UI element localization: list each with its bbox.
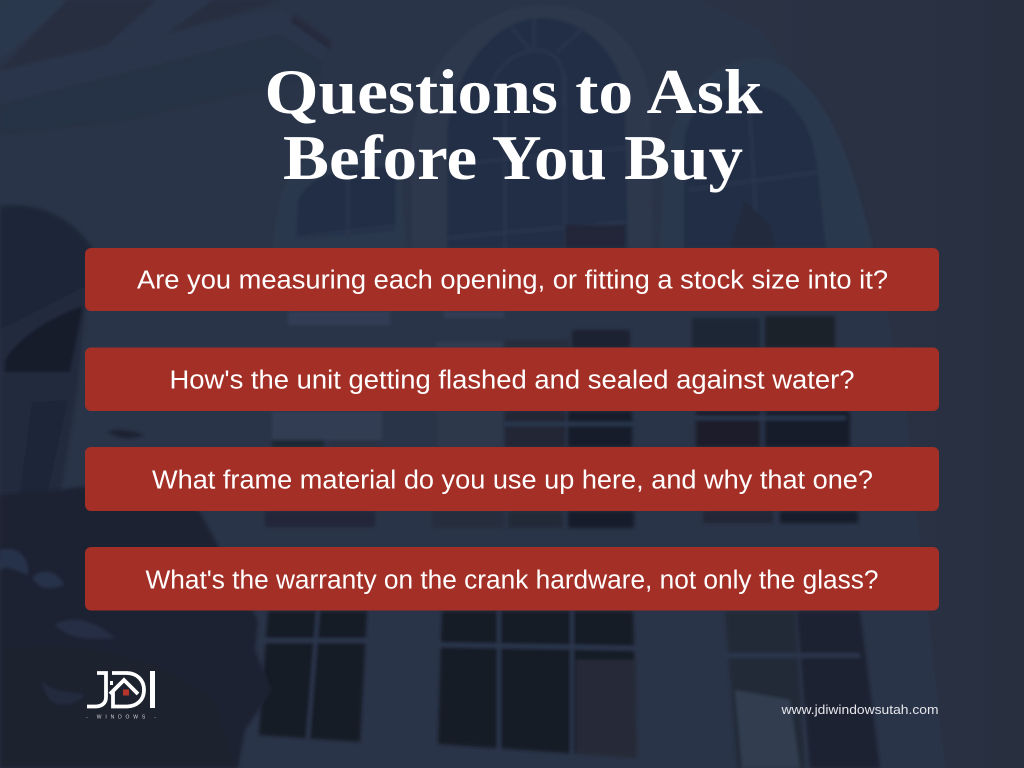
logo: JDI Windows — [86, 671, 156, 720]
logo subtitle: - WINDOWS - — [86, 714, 156, 720]
left dark archway — [0, 205, 92, 560]
right dark wall — [700, 0, 1024, 768]
title: Before You Buy — [283, 123, 743, 193]
question bar 4 — [85, 547, 939, 610]
lower windows row — [259, 611, 880, 768]
logo letter D with house — [110, 673, 144, 706]
logo letter J — [87, 673, 106, 706]
question bar 1: Are you measuring each opening, or fitting a stock size into it? — [137, 266, 888, 294]
title — [264, 57, 762, 193]
question bar 2: How's the unit getting flashed and sealed against water? — [170, 366, 854, 394]
question bar 4: What's the warranty on the crank hardware, not only the glass? — [146, 566, 879, 594]
title: Questions to Ask — [264, 57, 762, 127]
question bar 3 — [85, 447, 939, 511]
upper centre arched window — [412, 5, 652, 248]
question bar 1 — [85, 248, 939, 311]
shrub bottom left — [0, 430, 272, 768]
middle windows row — [265, 311, 858, 528]
upper left arched window — [272, 150, 405, 248]
question bar 2 — [85, 348, 939, 411]
question bar 3: What frame material do you use up here, and why that one? — [152, 466, 873, 494]
roof and eaves — [0, 0, 332, 135]
logo letter I — [150, 671, 155, 708]
website url: www.jdiwindowsutah.com — [780, 702, 938, 717]
upper right arched window — [660, 59, 872, 248]
